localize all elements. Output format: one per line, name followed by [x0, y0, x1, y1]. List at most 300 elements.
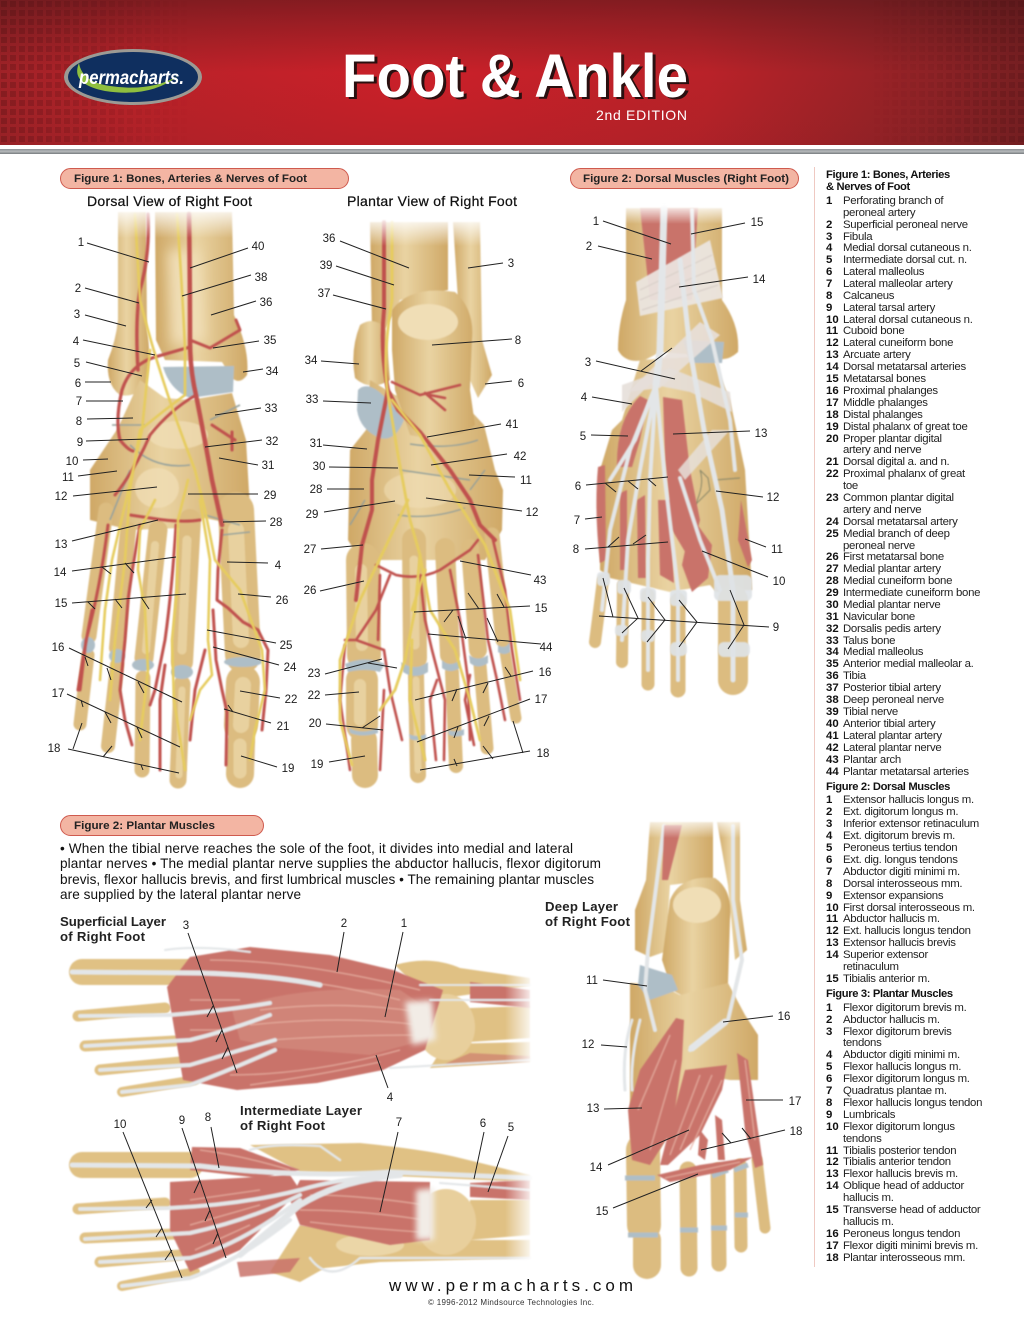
dorsal bones [80, 212, 262, 780]
legend: figure 1: Dorsal metatarsal artery [843, 516, 958, 528]
dorsal muscle number labels: 10 [773, 576, 785, 588]
legend: figure 1: 17 [826, 397, 839, 409]
plantar number labels: 8 [515, 335, 521, 347]
legend: figure 1: Lateral cuneiform bone [843, 337, 953, 349]
legend: figure 1: Deep peroneal nerve [843, 694, 944, 706]
dorsal number labels: 15 [55, 598, 67, 610]
dorsal muscle number labels: 14 [753, 274, 766, 286]
dorsal muscle number labels: 6 [575, 481, 581, 493]
legend: figure 2: Tibialis anterior m. [843, 973, 930, 985]
legend: figure 1 [826, 169, 980, 778]
plantar leader lines [320, 241, 541, 770]
legend: figure 1: Intermediate cuneiform bone [843, 587, 980, 599]
legend: figure 3: Flexor hallucis longus m. [843, 1061, 961, 1073]
legend: figure 1: artery and nerve [843, 504, 921, 516]
superficial layer heading: of Right Foot [60, 929, 146, 944]
legend: figure 3: hallucis m. [843, 1192, 894, 1204]
plantar number labels: 30 [313, 461, 325, 473]
superficial number labels: 3 [183, 920, 189, 932]
plantar number labels: 20 [309, 718, 321, 730]
legend: figure 3: Peroneus longus tendon [843, 1228, 960, 1240]
legend: figure 2: Extensor expansions [843, 890, 944, 902]
legend: figure 3: 5 [826, 1061, 833, 1073]
retinacula and tendons [597, 208, 752, 680]
dorsal number labels: 33 [265, 403, 277, 415]
plantar number labels: 15 [535, 603, 547, 615]
dorsal number labels: 40 [252, 241, 264, 253]
legend: figure 2: 8 [826, 878, 832, 890]
intermediate toes and bones [78, 1143, 530, 1286]
plantar number labels: 37 [318, 288, 330, 300]
legend: figure 2: Abductor digiti minimi m. [843, 866, 960, 878]
legend: figure 1: 6 [826, 266, 832, 278]
plantar number labels: 31 [310, 438, 322, 450]
deep layer number labels: 11 [586, 975, 598, 987]
legend: figure 1: Lateral plantar nerve [843, 742, 941, 754]
legend: figure 1: Middle phalanges [843, 397, 928, 409]
legend: figure 1: artery and nerve [843, 444, 921, 456]
dorsal number labels: 32 [266, 436, 278, 448]
superficial layer heading: Superficial Layer [60, 914, 166, 929]
plantar number labels: 18 [537, 748, 549, 760]
legend: figure 3: 7 [826, 1085, 832, 1097]
panel: deep layer [582, 816, 802, 1268]
dorsal number labels: 4 [73, 336, 80, 348]
legend: figure 3: Figure 3: Plantar Muscles [826, 988, 953, 1000]
intermediate muscles [72, 1145, 530, 1286]
superficial layer heading [60, 914, 166, 944]
logo: permacharts: permacharts. [78, 68, 184, 89]
legend: figure 3: Abductor digiti minimi m. [843, 1049, 960, 1061]
legend: figure 2: Extensor hallucis longus m. [843, 794, 974, 806]
legend: figure 3: Flexor digitorum longus [843, 1121, 955, 1133]
legend: figure 1: 9 [826, 302, 832, 314]
legend: figure 1: Superficial peroneal nerve [843, 219, 968, 231]
legend: figure 1: 29 [826, 587, 839, 599]
legend: figure 1: Figure 1: Bones, Arteries [826, 169, 950, 181]
legend: figure 3: Abductor hallucis m. [843, 1014, 940, 1026]
dorsal number labels: 4 [275, 560, 282, 572]
deep layer number labels: 14 [590, 1162, 603, 1174]
legend: figure 2: 7 [826, 866, 832, 878]
dorsal number labels: 18 [48, 743, 60, 755]
superficial number labels [183, 918, 407, 1104]
dorsal number labels: 5 [74, 358, 80, 370]
panel: figure 2 dorsal muscles [573, 204, 785, 690]
legend: figure 3: 14 [826, 1180, 839, 1192]
legend: figure 2: 3 [826, 818, 832, 830]
legend: figure 1: Proper plantar digital [843, 433, 942, 445]
dorsal view heading: Dorsal View of Right Foot [87, 193, 252, 209]
legend: figure 1: Dorsal metatarsal arteries [843, 361, 966, 373]
deep layer number labels [582, 975, 802, 1218]
dorsal number labels: 11 [62, 472, 74, 484]
legend: figure 3: Tibialis posterior tendon [843, 1145, 956, 1157]
dorsal muscle number labels: 13 [755, 428, 767, 440]
plantar number labels: 39 [320, 260, 332, 272]
legend: figure 2: Peroneus tertius tendon [843, 842, 957, 854]
dorsal muscle number labels: 7 [574, 515, 580, 527]
legend: figure 2: 14 [826, 949, 839, 961]
plantar number labels: 44 [540, 642, 553, 654]
figure 2 plantar muscles pill [60, 816, 264, 836]
dorsal number labels: 36 [260, 297, 272, 309]
legend: figure 2: Inferior extensor retinaculum [843, 818, 979, 830]
legend: figure 1: 4 [826, 242, 833, 254]
plantar number labels: 34 [305, 355, 318, 367]
legend: figure 1: Perforating branch of [843, 195, 944, 207]
plantar number labels: 42 [514, 451, 526, 463]
legend: figure 3: Transverse head of adductor [843, 1204, 981, 1216]
plantar number labels: 11 [520, 475, 532, 487]
plantar view heading: Plantar View of Right Foot [347, 193, 517, 209]
legend: figure 1: Medial dorsal cutaneous n. [843, 242, 972, 254]
superficial number labels: 4 [387, 1092, 394, 1104]
legend: figure 1: peroneal nerve [843, 540, 915, 552]
plantar nerves [340, 222, 520, 765]
legend: figure 2: 4 [826, 830, 833, 842]
legend: figure 2: First dorsal interosseous m. [843, 902, 975, 914]
text block: tibial nerve description [60, 841, 601, 902]
plantar number labels: 17 [535, 694, 547, 706]
legend: figure 1: Medial branch of deep [843, 528, 950, 540]
dorsal arteries [78, 214, 268, 770]
plantar number labels: 19 [311, 759, 323, 771]
legend: figure 2: 13 [826, 937, 839, 949]
legend: figure 1: Tibia [843, 670, 867, 682]
legend: figure 1: 18 [826, 409, 839, 421]
legend: figure 1: 37 [826, 682, 839, 694]
legend: figure 2: 12 [826, 925, 839, 937]
legend: figure 1: toe [843, 480, 858, 492]
legend: numbered key [826, 169, 982, 1264]
dorsal number labels: 28 [270, 517, 282, 529]
dorsal number labels: 31 [262, 460, 274, 472]
text block: tibial nerve description: • When the tibial nerve reaches the sole of the foot, it divides into medial and lateral [60, 841, 573, 856]
legend: figure 2: Figure 2: Dorsal Muscles [826, 781, 950, 793]
intermediate number labels: 6 [480, 1118, 486, 1130]
plantar number labels: 3 [508, 258, 514, 270]
legend: figure 1: 36 [826, 670, 839, 682]
legend: figure 2: 9 [826, 890, 832, 902]
legend: figure 1: Proximal phalanx of great [843, 468, 966, 480]
legend: figure 3: 8 [826, 1097, 832, 1109]
legend: figure 1: Lateral dorsal cutaneous n. [843, 314, 973, 326]
dorsal muscle number labels: 11 [771, 544, 783, 556]
deep layer number labels: 15 [596, 1206, 608, 1218]
legend divider [814, 167, 815, 1267]
legend: figure 1: Dorsalis pedis artery [843, 623, 941, 635]
deep layer muscles [624, 825, 763, 1182]
panel: intermediate layer [72, 1112, 535, 1286]
legend: figure 2: Dorsal interosseous mm. [843, 878, 962, 890]
legend: figure 1: Calcaneus [843, 290, 895, 302]
legend: figure 3: Flexor digitorum brevis [843, 1026, 952, 1038]
legend: figure 1: Cuboid bone [843, 325, 904, 337]
edition: 2nd EDITION [596, 107, 687, 123]
deep layer number labels: 12 [582, 1039, 594, 1051]
plantar arteries [340, 222, 520, 770]
legend: figure 1: 7 [826, 278, 832, 290]
plantar number labels [304, 233, 553, 771]
intermediate number labels: 8 [205, 1112, 211, 1124]
legend: figure 1: 14 [826, 361, 839, 373]
superficial leg fade [505, 960, 535, 1070]
legend: figure 1: 13 [826, 349, 839, 361]
legend: figure 3: 18 [826, 1252, 839, 1264]
plantar number labels: 16 [539, 667, 551, 679]
legend: figure 3: 11 [826, 1145, 839, 1157]
dorsal number labels: 26 [276, 595, 288, 607]
legend: figure 1: 8 [826, 290, 832, 302]
legend: figure 1: 44 [826, 766, 839, 778]
legend: figure 1: Metatarsal bones [843, 373, 926, 385]
legend: figure 3: 6 [826, 1073, 832, 1085]
deep layer heading: Deep Layer [545, 899, 618, 914]
plantar number labels: 41 [506, 419, 518, 431]
legend: figure 2: Ext. hallucis longus tendon [843, 925, 971, 937]
dorsal muscle number labels: 5 [580, 431, 586, 443]
legend: figure 1: 35 [826, 658, 839, 670]
plantar number labels: 12 [526, 507, 538, 519]
dorsal number labels: 9 [77, 437, 83, 449]
text block: tibial nerve description: are supplied by the lateral plantar nerve [60, 887, 301, 902]
deep layer number labels: 16 [778, 1011, 790, 1023]
legend: figure 1: 22 [826, 468, 839, 480]
legend: figure 2 [826, 781, 979, 985]
dorsal nerves [100, 214, 265, 770]
intermediate number labels: 7 [396, 1117, 402, 1129]
plantar number labels: 28 [310, 484, 322, 496]
logo: permacharts [64, 49, 202, 105]
dorsal muscle leader lines [585, 221, 769, 649]
legend: figure 1: 41 [826, 730, 839, 742]
legend: figure 1: Anterior tibial artery [843, 718, 936, 730]
intermediate leader lines [123, 1127, 508, 1278]
intermediate number labels: 9 [179, 1115, 185, 1127]
intermediate number labels: 10 [114, 1119, 126, 1131]
dorsal number labels: 7 [76, 396, 82, 408]
legend: figure 2: 11 [826, 913, 839, 925]
legend: figure 3: 10 [826, 1121, 839, 1133]
legend: figure 3: Tibialis anterior tendon [843, 1156, 951, 1168]
legend: figure 1: 15 [826, 373, 839, 385]
plantar number labels: 27 [304, 544, 316, 556]
dorsal number labels: 14 [54, 567, 67, 579]
dorsal number labels: 38 [255, 272, 267, 284]
legend: figure 3: Flexor digitorum brevis m. [843, 1002, 967, 1014]
legend: figure 1: 10 [826, 314, 839, 326]
legend: figure 1: Dorsal digital a. and n. [843, 456, 950, 468]
legend: figure 3: 12 [826, 1156, 839, 1168]
panel: dorsal view of right foot [48, 206, 297, 780]
legend: figure 1: Posterior tibial artery [843, 682, 941, 694]
dorsal number labels: 24 [284, 662, 297, 674]
legend: figure 3: tendons [843, 1037, 882, 1049]
dorsal number labels: 3 [74, 309, 80, 321]
superficial number labels: 2 [341, 918, 347, 930]
legend: figure 3: Flexor digitorum longus m. [843, 1073, 970, 1085]
legend: figure 3: Flexor hallucis longus tendon [843, 1097, 982, 1109]
dorsal muscle number labels [573, 216, 785, 634]
legend: figure 1: 5 [826, 254, 833, 266]
legend: figure 2: Ext. dig. longus tendons [843, 854, 958, 866]
dorsal number labels: 35 [264, 335, 276, 347]
dorsal number labels: 13 [55, 539, 67, 551]
legend: figure 2: retinaculum [843, 961, 899, 973]
plantar number labels: 6 [518, 378, 524, 390]
panel: plantar view of right foot [304, 216, 553, 775]
legend: figure 2: Ext. digitorum brevis m. [843, 830, 955, 842]
dorsal number labels: 34 [266, 366, 279, 378]
dorsal number labels: 22 [285, 694, 297, 706]
legend: figure 1: 31 [826, 611, 839, 623]
plantar number labels: 26 [304, 585, 316, 597]
legend: figure 1: Plantar metatarsal arteries [843, 766, 969, 778]
dorsal number labels: 17 [52, 688, 64, 700]
intermediate number labels: 5 [508, 1122, 514, 1134]
legend: figure 3: hallucis m. [843, 1216, 894, 1228]
dorsal muscle number labels: 1 [593, 216, 599, 228]
dorsal muscle number labels: 9 [773, 622, 779, 634]
legend: figure 1: 16 [826, 385, 839, 397]
legend: figure 3: 2 [826, 1014, 832, 1026]
title: Foot & Ankle [345, 44, 691, 112]
deep layer heading [545, 899, 631, 929]
figure 1 heading pill [60, 168, 348, 188]
legend: figure 3: Lumbricals [843, 1109, 896, 1121]
legend: figure 1: 1 [826, 195, 833, 207]
legend: figure 3: 9 [826, 1109, 832, 1121]
legend: figure 1: Plantar arch [843, 754, 901, 766]
legend: figure 1: 40 [826, 718, 839, 730]
legend: figure 3: 16 [826, 1228, 839, 1240]
legend: figure 3: 4 [826, 1049, 833, 1061]
legend: figure 1: 21 [826, 456, 839, 468]
dorsal muscle number labels: 15 [751, 217, 763, 229]
legend: figure 1: Proximal phalanges [843, 385, 938, 397]
legend: figure 2: 10 [826, 902, 839, 914]
legend: figure 2: 1 [826, 794, 833, 806]
legend: figure 1: Common plantar digital [843, 492, 954, 504]
deep layer leader lines [601, 980, 785, 1208]
plantar number labels: 23 [308, 668, 320, 680]
legend: figure 2: 5 [826, 842, 833, 854]
deep layer number labels: 18 [790, 1126, 802, 1138]
plantar number labels: 29 [306, 509, 318, 521]
plantar number labels: 43 [534, 575, 546, 587]
dorsal muscle number labels: 4 [581, 392, 588, 404]
title: Foot & Ankle [342, 42, 688, 110]
legend: figure 1: 2 [826, 219, 832, 231]
legend: figure 1: 27 [826, 563, 839, 575]
dorsal number labels: 16 [52, 642, 64, 654]
dorsal number labels: 29 [264, 490, 276, 502]
deep layer fade [640, 816, 750, 838]
deep layer heading: of Right Foot [545, 914, 631, 929]
legend: figure 2: 15 [826, 973, 839, 985]
legend: figure 1: 34 [826, 646, 839, 658]
dorsal number labels: 19 [282, 763, 294, 775]
intermediate leg fade [505, 1150, 535, 1265]
legend: figure 1: Arcuate artery [843, 349, 911, 361]
legend: figure 1: 32 [826, 623, 839, 635]
figure 2 heading pill [570, 168, 798, 188]
dorsal muscle number labels: 3 [585, 357, 591, 369]
superficial toes and bones [78, 961, 530, 1092]
legend: figure 1: peroneal artery [843, 207, 916, 219]
legend: figure 1: 42 [826, 742, 839, 754]
legend: figure 3: 1 [826, 1002, 833, 1014]
dorsal number labels [48, 237, 297, 775]
copyright: © 1996-2012 Mindsource Technologies Inc. [428, 1298, 594, 1307]
figure 2 heading pill: Figure 2: Dorsal Muscles (Right Foot) [583, 173, 789, 185]
dorsal number labels: 10 [66, 456, 78, 468]
legend: figure 1: & Nerves of Foot [826, 181, 911, 193]
legend: figure 1: Tibial nerve [843, 706, 898, 718]
legend: figure 1: Lateral tarsal artery [843, 302, 936, 314]
legend: figure 1: 23 [826, 492, 839, 504]
plantar leg fade [365, 216, 485, 246]
legend: figure 3: Plantar interosseous mm. [843, 1252, 965, 1264]
legend: figure 3: tendons [843, 1133, 882, 1145]
legend: figure 1: Medial plantar nerve [843, 599, 940, 611]
deep layer number labels: 17 [789, 1096, 801, 1108]
legend: figure 1: Distal phalanx of great toe [843, 421, 968, 433]
dorsal muscle bones [595, 208, 752, 690]
legend: figure 1: Distal phalanges [843, 409, 923, 421]
dorsal muscle bellies [596, 208, 752, 592]
legend: figure 1: Intermediate dorsal cut. n. [843, 254, 967, 266]
legend: figure 1: 43 [826, 754, 839, 766]
legend: figure 3: Flexor digiti minimi brevis m. [843, 1240, 978, 1252]
superficial muscles [72, 947, 530, 1092]
website url: www.permacharts.com [388, 1276, 633, 1295]
dorsal muscle number labels: 12 [767, 492, 779, 504]
legend: figure 1: Anterior medial malleolar a. [843, 658, 974, 670]
dorsal muscle number labels: 8 [573, 544, 579, 556]
legend: figure 3: 3 [826, 1026, 832, 1038]
legend: figure 1: Lateral plantar artery [843, 730, 942, 742]
legend: figure 1: 33 [826, 635, 839, 647]
legend: figure 1: Medial malleolus [843, 646, 924, 658]
plantar number labels: 36 [323, 233, 335, 245]
dorsal number labels: 12 [55, 491, 67, 503]
figure 2 plantar muscles pill: Figure 2: Plantar Muscles [74, 820, 215, 832]
superficial number labels: 1 [401, 918, 407, 930]
legend: figure 1: 26 [826, 551, 839, 563]
legend: figure 1: 12 [826, 337, 839, 349]
text block: tibial nerve description: brevis, flexor hallucis brevis, and first lumbrical muscles • The remaining plantar muscles [60, 872, 594, 887]
deep layer number labels: 13 [587, 1103, 599, 1115]
legend: figure 1: Medial plantar artery [843, 563, 941, 575]
legend: figure 1: 25 [826, 528, 839, 540]
plantar number labels: 22 [308, 690, 320, 702]
legend: figure 2: Superior extensor [843, 949, 928, 961]
legend: figure 1: 19 [826, 421, 839, 433]
dorsal number labels: 21 [277, 721, 289, 733]
dorsal leg fade [105, 206, 245, 238]
legend: figure 1: 11 [826, 325, 839, 337]
legend: figure 2: Ext. digitorum longus m. [843, 806, 958, 818]
dorsal number labels: 2 [75, 283, 81, 295]
legend: figure 1: 28 [826, 575, 839, 587]
legend: figure 1: Medial cuneiform bone [843, 575, 952, 587]
dorsal number labels: 8 [76, 416, 82, 428]
legend: figure 2: 6 [826, 854, 832, 866]
legend: figure 1: Talus bone [843, 635, 895, 647]
dorsal number labels: 1 [78, 237, 84, 249]
